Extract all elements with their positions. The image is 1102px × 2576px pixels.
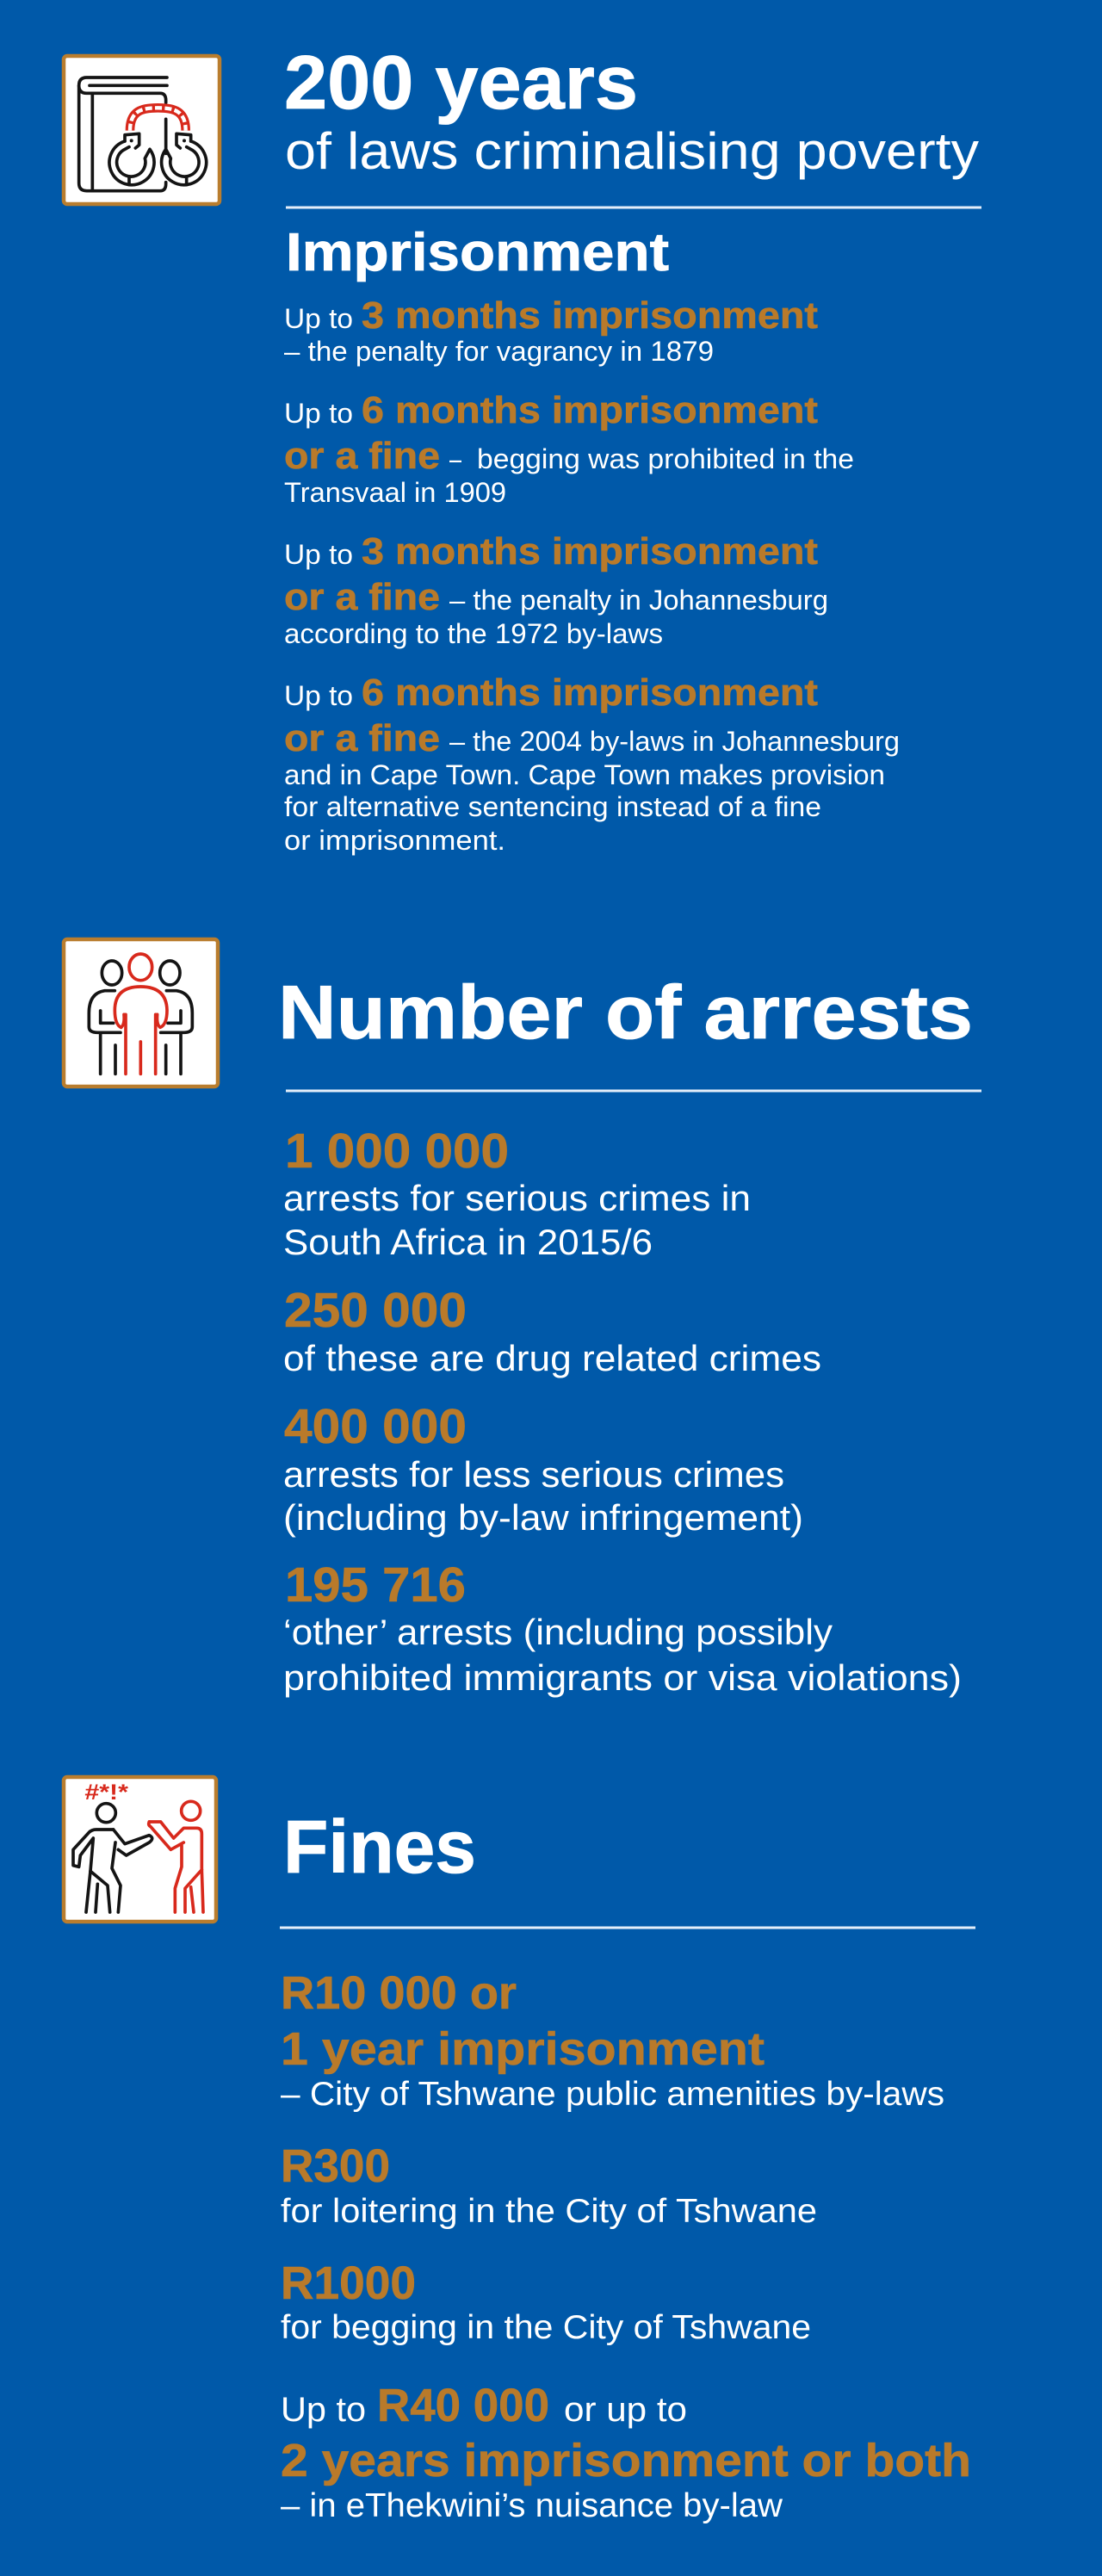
title (284, 40, 979, 180)
fine: R40 000 eThekwini: 2 years imprisonment or both (281, 2435, 971, 2486)
text block: 1972 Johannesburg by-laws: or a fine (284, 576, 440, 618)
fine: R10 000 or 1 year imprisonment (281, 1967, 944, 2113)
text block: 1972 Johannesburg by-laws: – the penalty in Johannesburg (449, 585, 828, 616)
text block: 2004 by-laws: or a fine (284, 717, 440, 759)
stat: 400 000 less serious: arrests for less serious crimes (283, 1454, 784, 1495)
text block: 2004 by-laws: for alternative sentencing instead of a fine (284, 791, 821, 822)
text block: 1972 Johannesburg by-laws: Up to (284, 539, 353, 570)
stat: 1 000 000 arrests (283, 1124, 751, 1262)
text block: 2004 by-laws: and in Cape Town. Cape Town makes provision (284, 759, 885, 790)
icon: book and handcuffs (64, 56, 220, 204)
fine: R10 000 or 1 year imprisonment: 1 year imprisonment (281, 2023, 765, 2075)
text block: 1879 vagrancy penalty: 3 months imprisonment (362, 294, 818, 337)
stat: 195 716 other arrests: 195 716 (285, 1557, 466, 1613)
stat: 250 000 drug related: of these are drug related crimes (283, 1338, 821, 1378)
title: 200 years (284, 40, 638, 125)
fine: R1000 begging: for begging in the City of Tshwane (281, 2309, 811, 2346)
text block: 1909 begging in Transvaal: or a fine (284, 435, 440, 477)
stat: 1 000 000 arrests: South Africa in 2015/6 (283, 1222, 653, 1262)
stat: 250 000 drug related: 250 000 (284, 1283, 467, 1338)
text block: 1972 Johannesburg by-laws: according to the 1972 by-laws (284, 618, 663, 649)
title: of laws criminalising poverty (285, 122, 979, 180)
stat: 195 716 other arrests: prohibited immigrants or visa violations) (283, 1657, 962, 1698)
text block: 1909 begging in Transvaal: – (449, 443, 461, 474)
stat: 1 000 000 arrests: 1 000 000 (285, 1124, 509, 1179)
stat: 195 716 other arrests: ‘other’ arrests (including possibly (283, 1612, 833, 1652)
icon: two people arguing: #*!* (84, 1780, 128, 1805)
fine: R300 loitering: for loitering in the City of Tshwane (281, 2193, 817, 2230)
heading: number of arrests: Number of arrests (278, 969, 973, 1055)
text block: 1879 vagrancy penalty: – the penalty for vagrancy in 1879 (284, 336, 714, 367)
fine: R10 000 or 1 year imprisonment: – City of Tshwane public amenities by-laws (281, 2076, 944, 2113)
text block: 1972 Johannesburg by-laws (284, 530, 828, 649)
fine: R40 000 eThekwini: – in eThekwini’s nuisance by-law (281, 2487, 783, 2524)
fine: R40 000 eThekwini: Up to (281, 2391, 366, 2429)
stat: 400 000 less serious: 400 000 (284, 1399, 467, 1454)
text block: 1972 Johannesburg by-laws: 3 months imprisonment (362, 530, 818, 573)
heading: fines: Fines (283, 1805, 476, 1889)
text block: 1909 begging in Transvaal: Up to (284, 398, 353, 429)
fine: R10 000 or 1 year imprisonment: R10 000 or (281, 1967, 517, 2019)
fine: R1000 begging (281, 2257, 811, 2346)
heading: imprisonment: Imprisonment (286, 223, 669, 282)
fine: R300 loitering: R300 (281, 2140, 390, 2192)
text block: 1909 begging in Transvaal: 6 months imprisonment (362, 389, 818, 431)
text block: 2004 by-laws (284, 672, 900, 856)
fine: R40 000 eThekwini (281, 2380, 971, 2524)
text block: 2004 by-laws: or imprisonment. (284, 825, 505, 856)
text block: 1909 begging in Transvaal: Transvaal in 1909 (284, 477, 506, 508)
fine: R40 000 eThekwini: R40 000 (377, 2380, 549, 2431)
stat: 400 000 less serious: (including by-law infringement) (283, 1497, 803, 1538)
text block: 1879 vagrancy penalty (284, 294, 818, 367)
stat: 195 716 other arrests (283, 1557, 962, 1698)
text block: 2004 by-laws: Up to (284, 680, 353, 711)
fine: R1000 begging: R1000 (281, 2257, 416, 2309)
text block: 2004 by-laws: – the 2004 by-laws in Johannesburg (449, 726, 900, 757)
fine: R300 loitering (281, 2140, 817, 2230)
stat: 1 000 000 arrests: arrests for serious crimes in (283, 1178, 751, 1218)
icon: two people arguing (64, 1777, 216, 1922)
text block: 1879 vagrancy penalty: Up to (284, 303, 353, 334)
stat: 250 000 drug related (283, 1283, 821, 1378)
stat: 400 000 less serious (283, 1399, 803, 1538)
text block: 1909 begging in Transvaal (284, 389, 854, 508)
text block: 1909 begging in Transvaal: begging was prohibited in the (477, 443, 854, 474)
fine: R40 000 eThekwini: or up to (564, 2391, 687, 2429)
icon: three people (64, 939, 218, 1087)
text block: 2004 by-laws: 6 months imprisonment (362, 672, 818, 714)
